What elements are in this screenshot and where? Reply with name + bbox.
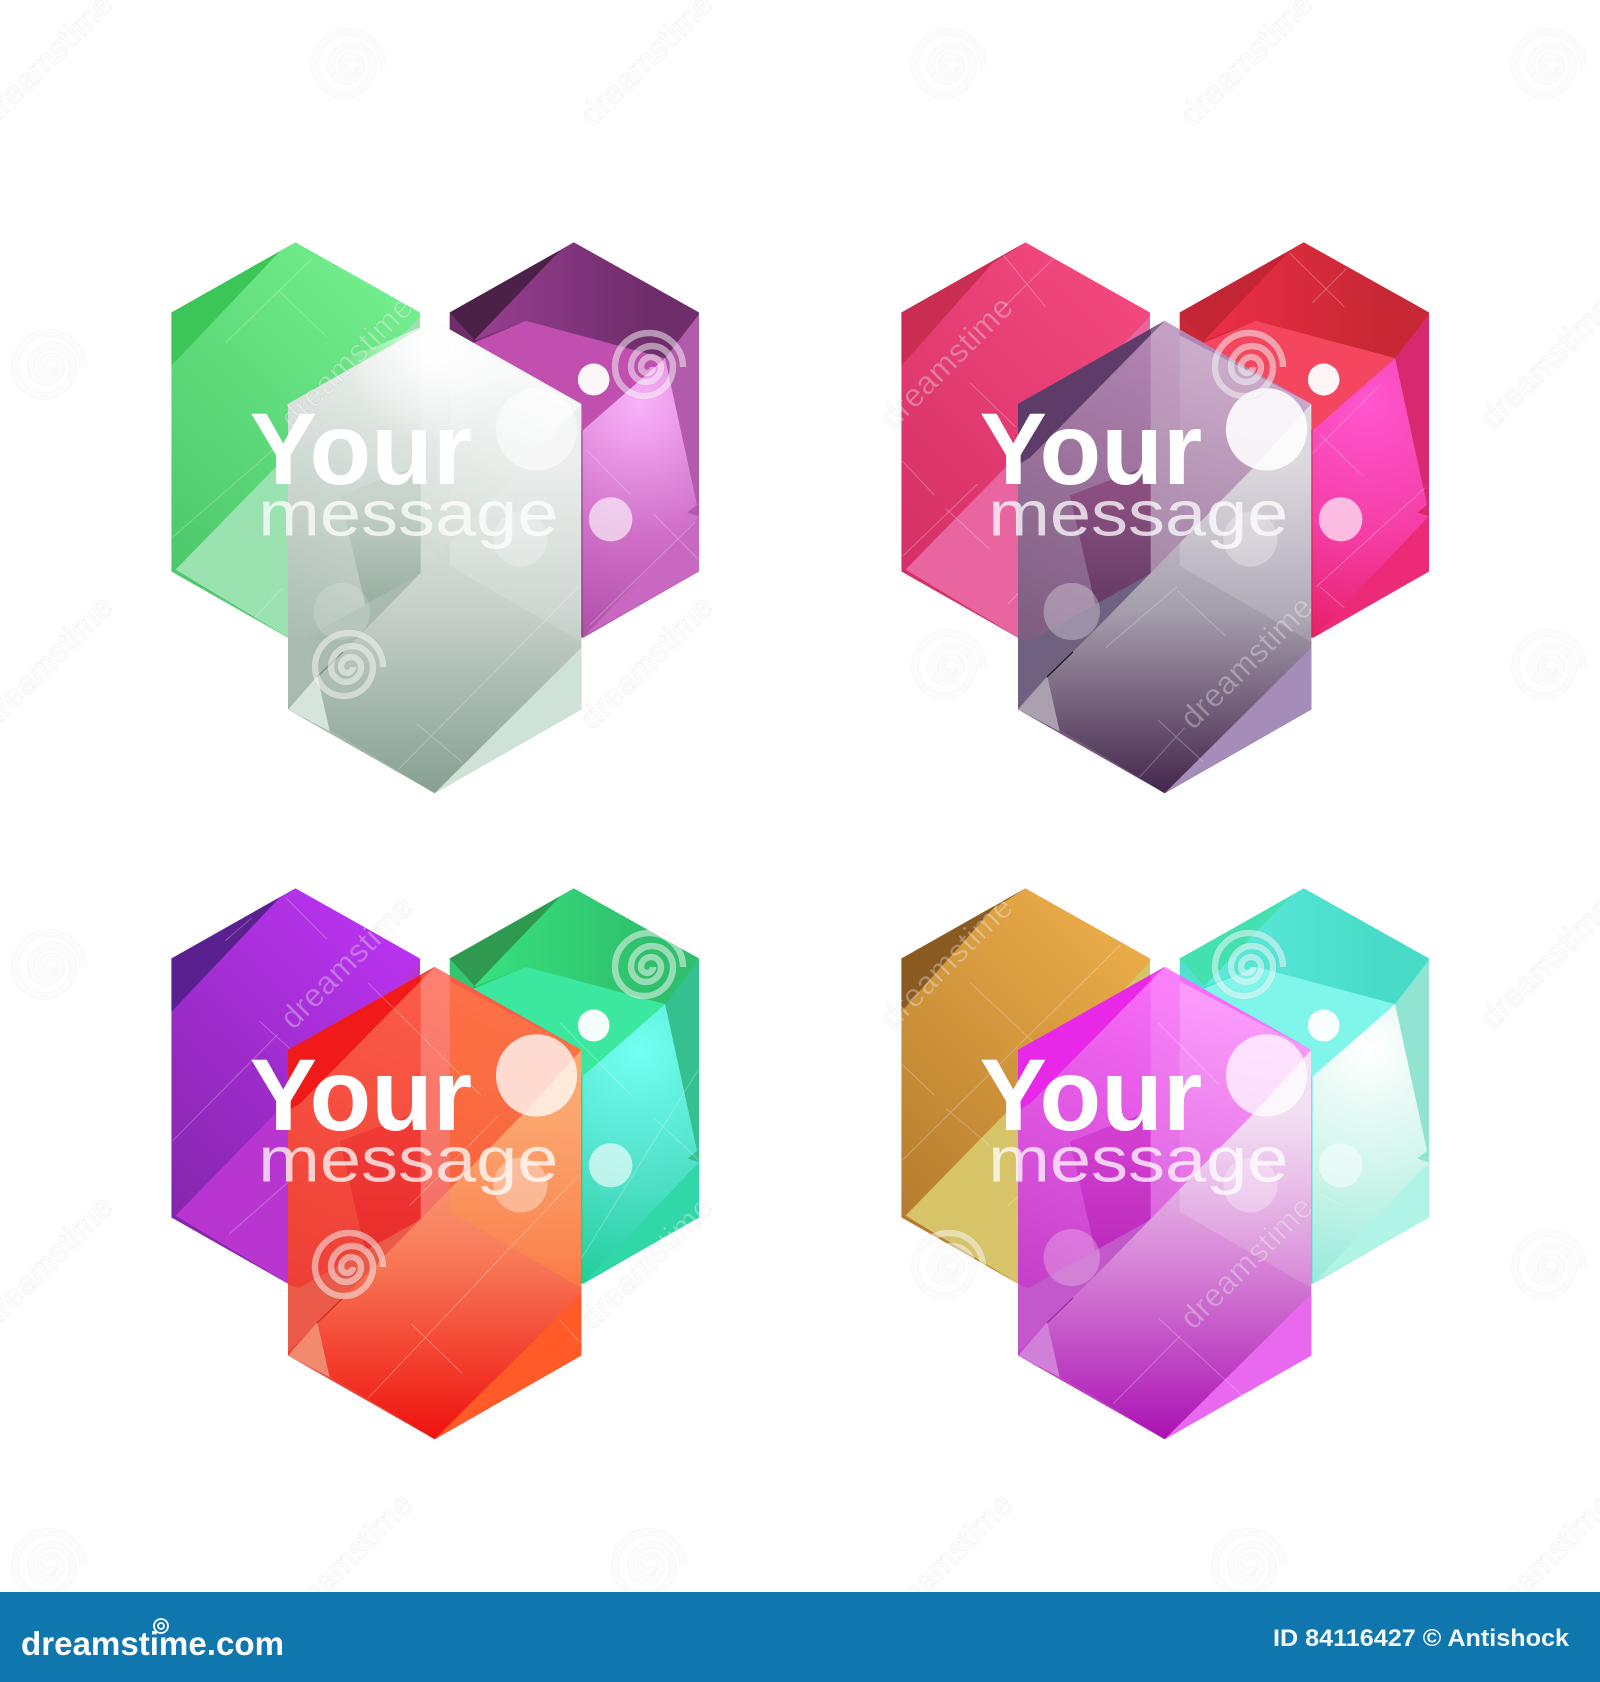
- dot: low right: [493, 512, 547, 567]
- footer credit: ID 84116427 © Antishock: [1273, 1625, 1570, 1652]
- heading: amber cluster: [980, 1038, 1288, 1196]
- hexagon cluster: crimson, red, violet: [901, 242, 1429, 793]
- right hexagon: green: [450, 888, 699, 1288]
- heading: crimson cluster: Your: [980, 392, 1202, 506]
- footer bar: [0, 1592, 1600, 1682]
- heading: amber cluster: message: [988, 1124, 1288, 1196]
- watermark text: dreamstime: [273, 289, 420, 436]
- dot: small: [1308, 363, 1339, 395]
- dot: large: [1226, 388, 1307, 471]
- heading: purple cluster: [250, 1038, 558, 1196]
- dot: low left: [1044, 1229, 1100, 1286]
- right hexagon: purple: [450, 242, 699, 642]
- left hexagon: purple: [171, 888, 420, 1288]
- heading: crimson cluster: message: [988, 478, 1288, 550]
- heading: purple cluster: Your: [250, 1038, 472, 1152]
- centre hexagon: violet: [1018, 321, 1311, 793]
- dot: small: [578, 1009, 609, 1041]
- centre hexagon: grey: [288, 321, 581, 793]
- watermark text: dreamstime: [1173, 1189, 1320, 1336]
- watermark text: dreamstime: [573, 1189, 720, 1336]
- left hexagon: crimson: [901, 242, 1150, 642]
- footer logo text: dreamstime.com: [21, 1625, 284, 1662]
- heading: purple cluster: message: [258, 1124, 558, 1196]
- hexagon cluster: green, purple, grey: [171, 242, 699, 793]
- dot: medium: [1319, 1143, 1362, 1187]
- watermark text: dreamstime: [573, 589, 720, 736]
- heading: green cluster: Your: [250, 392, 472, 506]
- watermark text: dreamstime: [873, 1486, 1020, 1633]
- watermark text: dreamstime: [1173, 589, 1320, 736]
- watermark text: dreamstime: [873, 889, 1020, 1036]
- dot: large: [496, 1034, 577, 1117]
- dot: medium: [589, 497, 632, 541]
- heading: green cluster: [250, 392, 558, 550]
- dot: medium: [1319, 497, 1362, 541]
- dot: low right: [1223, 512, 1277, 567]
- heading: amber cluster: Your: [980, 1038, 1202, 1152]
- dot: medium: [589, 1143, 632, 1187]
- dot: low left: [314, 583, 370, 640]
- dot: small: [578, 363, 609, 395]
- watermark text: dreamstime: [273, 1486, 420, 1633]
- dot: large: [1226, 1034, 1307, 1117]
- left hexagon: green: [171, 242, 420, 642]
- right hexagon: red: [1180, 242, 1429, 642]
- heading: green cluster: message: [258, 478, 558, 550]
- watermark text: dreamstime: [273, 889, 420, 1036]
- hexagon cluster: purple, green, red: [171, 888, 699, 1439]
- hexagon cluster: amber, teal, magenta: [901, 888, 1429, 1439]
- footer logo icon: [154, 1619, 168, 1633]
- heading: crimson cluster: [980, 392, 1288, 550]
- dot: low left: [1044, 583, 1100, 640]
- left hexagon: amber: [901, 888, 1150, 1288]
- dot: large: [496, 388, 577, 471]
- watermark text: dreamstime: [873, 289, 1020, 436]
- right hexagon: teal: [1180, 888, 1429, 1288]
- centre hexagon: red: [288, 967, 581, 1439]
- centre hexagon: magenta: [1018, 967, 1311, 1439]
- dot: low right: [1223, 1158, 1277, 1213]
- dot: low right: [493, 1158, 547, 1213]
- dot: small: [1308, 1009, 1339, 1041]
